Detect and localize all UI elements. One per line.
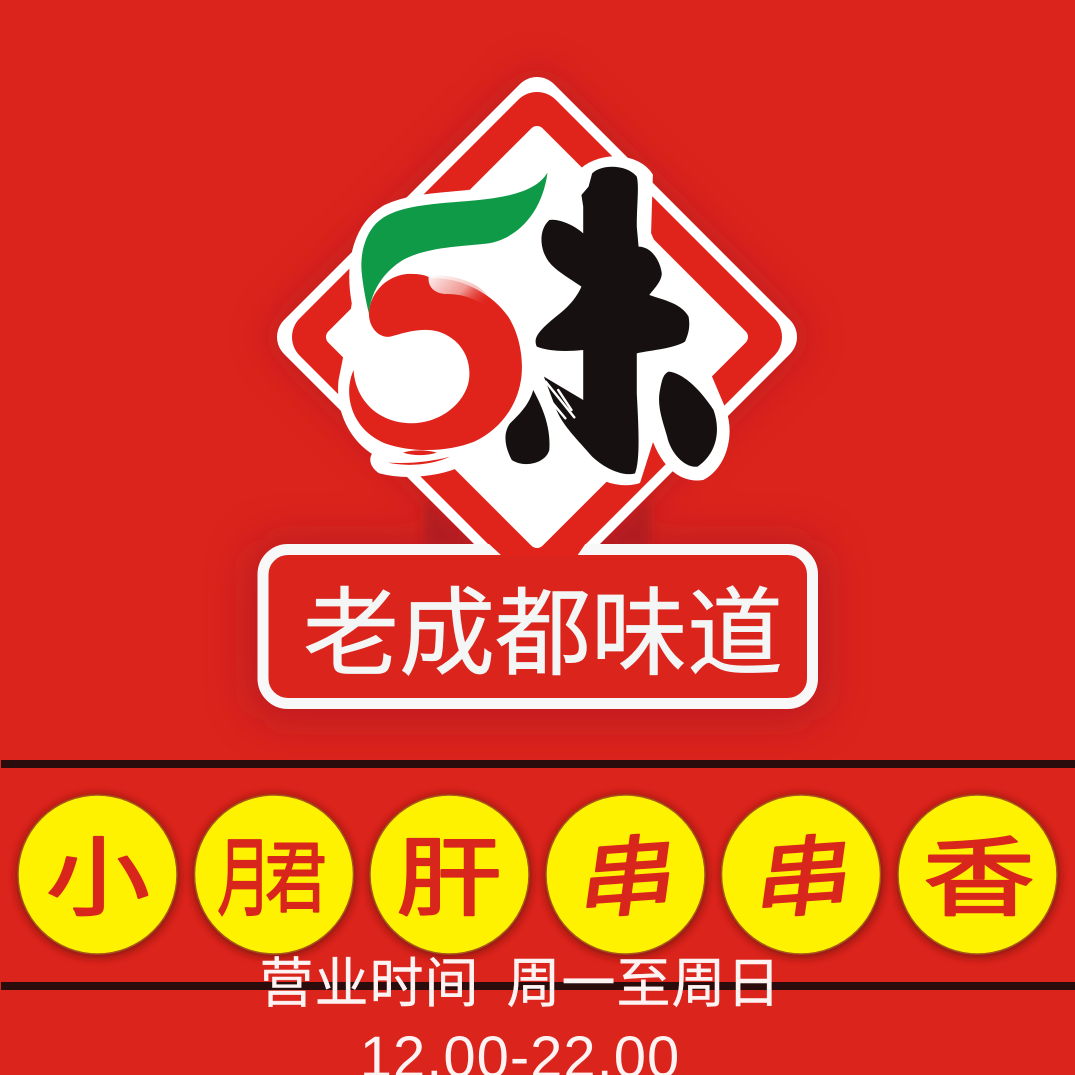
left dot stroke: [505, 390, 550, 464]
badge: 郡: [194, 795, 354, 954]
badge: 郡: 君: [265, 835, 327, 922]
shadow wedges above slogan box: [425, 497, 650, 548]
badge: 肝: 肝: [397, 831, 501, 927]
five and character mark: [340, 158, 728, 484]
badge: 串: [546, 795, 705, 954]
slogan text: 老成都味道: [303, 581, 783, 688]
right dot stroke: [659, 372, 717, 467]
inner white diamond: [334, 134, 740, 540]
green leaf: [361, 173, 547, 313]
slogan box: [263, 543, 812, 704]
badge: 串: 串: [750, 826, 860, 930]
swirl brush strokes: [388, 450, 450, 465]
badge: 肝: [370, 795, 529, 954]
badge: 香: 香: [923, 831, 1035, 927]
menu badges: [18, 795, 1057, 954]
badge: 郡: 月: [217, 831, 271, 927]
top divider line: [1, 760, 1075, 768]
badge: 串: [722, 795, 880, 954]
bottom divider line: [1, 982, 1075, 990]
circle shadows: [16, 794, 1060, 958]
badge: 小: 小: [46, 831, 150, 927]
swirl highlight: [429, 275, 494, 314]
diamond frame: [301, 101, 773, 573]
badge: 串: 串: [574, 826, 684, 930]
logo shadow: [250, 70, 825, 720]
opening days: 营业时间 周一至周日: [259, 954, 782, 1014]
brush streak highlights: [546, 382, 574, 418]
red five swirl: [349, 274, 522, 450]
badge: 小: [18, 795, 177, 954]
black character main strokes: [536, 167, 689, 474]
badge: 香: [898, 795, 1057, 954]
white outline: [340, 158, 728, 484]
logo emblem: [263, 101, 812, 704]
